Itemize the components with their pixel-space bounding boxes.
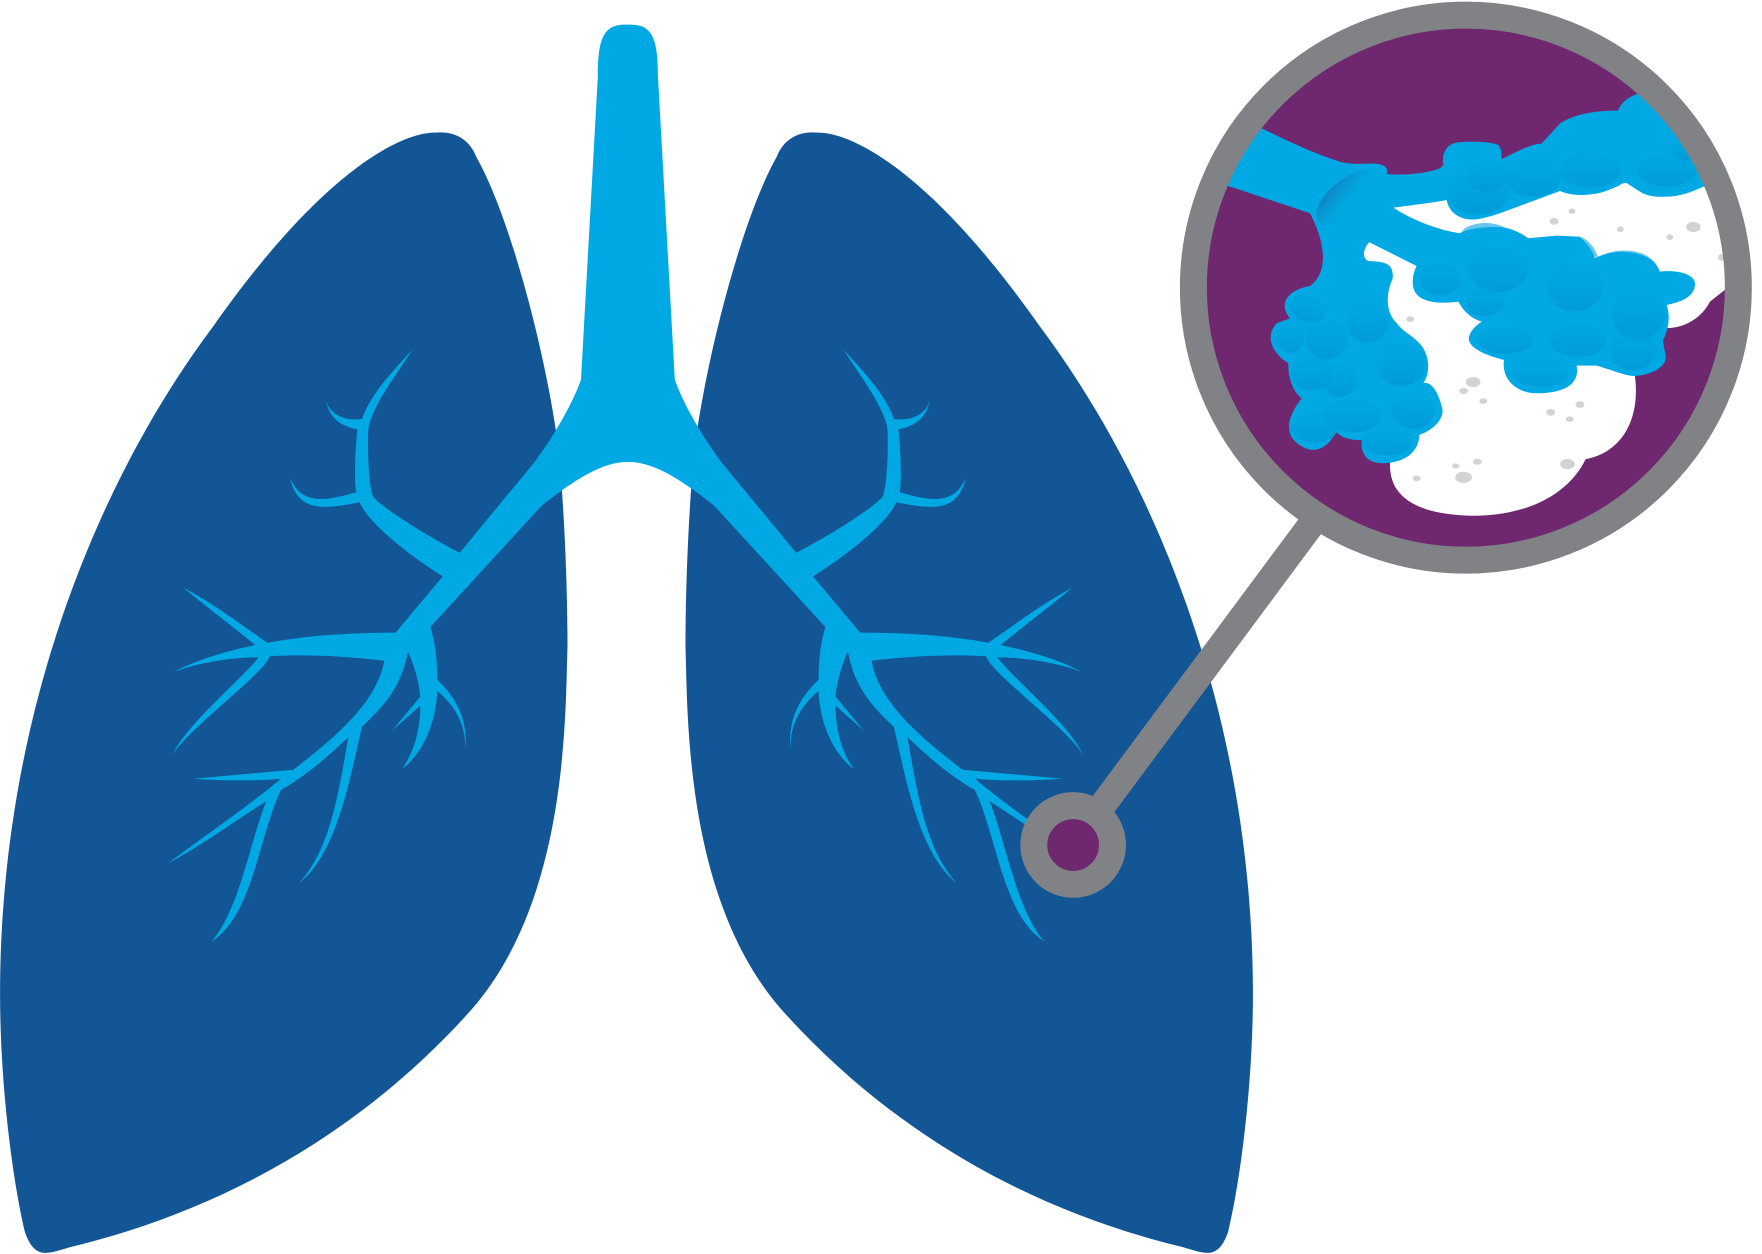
light blob highlights (1461, 223, 1660, 273)
airway opening shadow (1316, 171, 1362, 225)
airway and alveoli clusters (1228, 94, 1704, 464)
right bronchial tree (628, 25, 1087, 942)
left lung (0, 132, 567, 1253)
particles (1406, 208, 1725, 483)
right lung (685, 132, 1253, 1253)
lens ring (1193, 15, 1738, 560)
white air space (1364, 183, 1725, 516)
left bronchial tree (169, 25, 628, 942)
magnifier handle (1073, 512, 1320, 845)
lens background (1206, 28, 1725, 547)
small locator circle (1034, 806, 1112, 884)
magnified alveoli view (1206, 28, 1725, 547)
alveoli shading (1275, 140, 1701, 455)
trachea and bronchi (169, 25, 1087, 942)
